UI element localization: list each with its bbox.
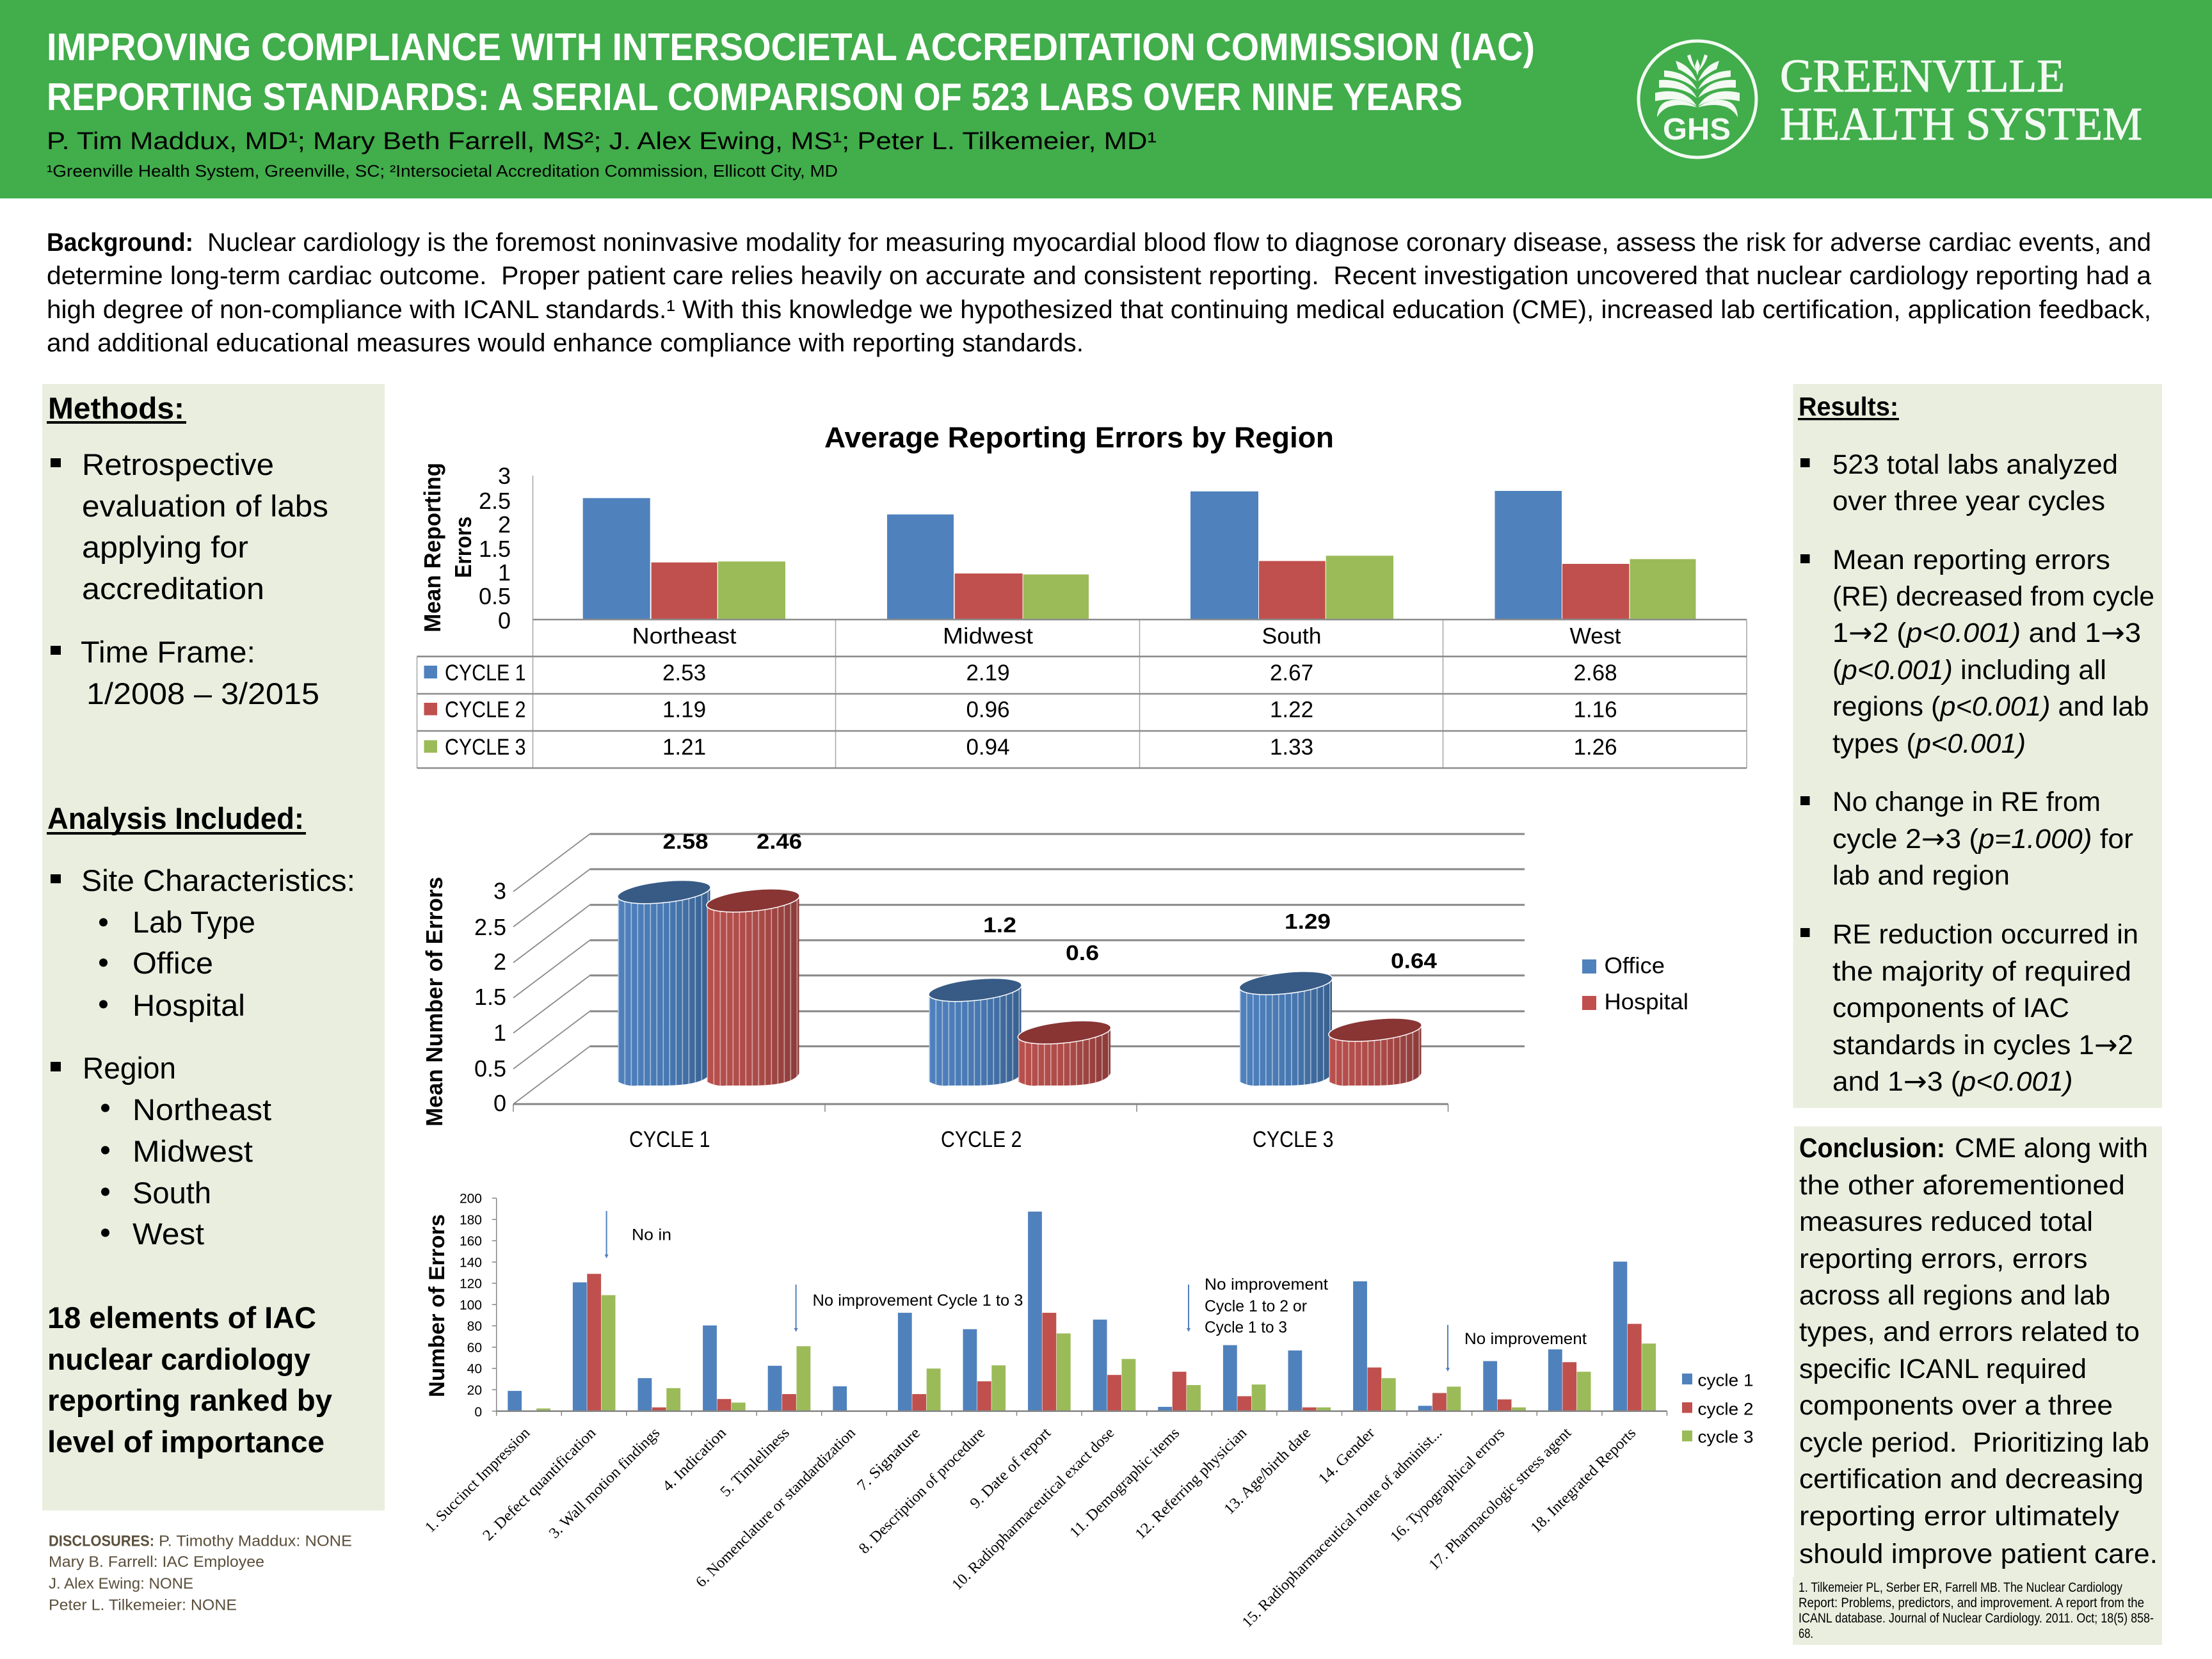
category labels: CYCLE 3	[1253, 1127, 1334, 1152]
result bullet: reduction: RE reduction occurred in	[1832, 919, 2138, 950]
methods list: evaluation of labs	[82, 489, 328, 523]
y axis tick labels: 1	[498, 559, 511, 586]
y axis title: Mean Reporting	[419, 463, 445, 632]
bold note: 18 elements: level of importance	[47, 1425, 325, 1459]
header banner	[0, 0, 2212, 198]
legend	[1682, 1371, 1754, 1447]
data table: 1.19	[662, 698, 706, 722]
disclosures: Mary B. Farrell: IAC Employee	[49, 1553, 264, 1571]
chart: average reporting errors by region	[417, 421, 1747, 768]
x axis labels: 17. Pharmacologic stress agent	[1426, 1425, 1575, 1573]
annotation: no improvement cycle 1 to 2 or 1 to 3	[1187, 1276, 1328, 1336]
result bullet: mean reporting errors: types (p<0.001)	[1832, 728, 2026, 759]
conclusion text: across all regions and lab	[1799, 1280, 2110, 1311]
y axis tick labels	[460, 1192, 482, 1420]
result bullet: no change: No change in RE from	[1832, 787, 2101, 817]
analysis list: West	[132, 1217, 204, 1251]
data table: CYCLE 1	[445, 661, 526, 685]
conclusion text: specific ICANL required	[1799, 1354, 2087, 1384]
category labels	[629, 1127, 1334, 1152]
y axis title: Errors	[450, 517, 476, 578]
conclusion text: measures reduced total	[1799, 1206, 2093, 1237]
disclosures	[49, 1532, 352, 1614]
analysis list: Northeast	[132, 1093, 271, 1126]
analysis list: Region	[83, 1051, 176, 1085]
data labels: 2.58	[663, 830, 708, 853]
conclusion text: reporting errors, errors	[1799, 1244, 2088, 1274]
analysis list: South	[132, 1176, 211, 1210]
bars: cycle 2	[652, 561, 1629, 620]
data table: South	[1262, 623, 1321, 649]
annotation: no improvement cycle 1 to 2 or 1 to 3: Cycle 1 to 3	[1205, 1318, 1287, 1336]
x axis labels: 10. Radiopharmaceutical exact dose	[949, 1425, 1118, 1594]
bars: cycle 3	[536, 1295, 1656, 1411]
result bullet: labs analyzed	[1800, 449, 2118, 517]
y axis tick labels: 100	[460, 1298, 482, 1313]
data table: Midwest	[943, 623, 1033, 649]
data table: 1.21	[662, 735, 706, 760]
data table: 2.67	[1270, 661, 1313, 685]
y axis tick labels: 2.5	[479, 488, 511, 514]
cylinder: cycle 1 office	[616, 877, 712, 1086]
authors: P. Tim Maddux, MD¹; Mary Beth Farrell, MS²; J. Alex Ewing, MS¹; Peter L. Tilkemeier, MD¹	[47, 128, 1157, 155]
y axis tick labels: 2.5	[474, 914, 506, 940]
data table: 1.26	[1573, 735, 1617, 760]
y axis tick labels: 180	[460, 1213, 482, 1228]
conclusion text	[1799, 1133, 2158, 1569]
y axis tick labels: 0	[474, 1405, 482, 1420]
y axis tick labels: 1	[493, 1020, 506, 1046]
background paragraph: and additional educational measures would enhance compliance with reporting standards.	[47, 329, 1084, 357]
y axis tick labels: 0.5	[474, 1055, 506, 1082]
bold note: 18 elements: reporting ranked by	[47, 1383, 332, 1417]
x axis labels: 2. Defect quantification	[480, 1425, 599, 1544]
disclosures: Peter L. Tilkemeier: NONE	[49, 1596, 237, 1614]
y axis tick labels: 200	[460, 1192, 482, 1206]
result bullet: reduction: the majority of required	[1832, 956, 2131, 987]
data labels: 1.29	[1285, 910, 1331, 933]
title: REPORTING STANDARDS: A SERIAL COMPARISON OF 523 LABS OVER NINE YEARS	[47, 76, 1463, 118]
result bullet: no change: lab and region	[1832, 860, 2010, 891]
cylinder: cycle 2 hospital	[1017, 1017, 1112, 1086]
background paragraph: Background:	[47, 228, 193, 257]
y axis title: Mean Number of Errors	[421, 877, 447, 1126]
cylinder: cycle 1 hospital	[705, 885, 801, 1086]
disclosures: DISCLOSURES:	[49, 1532, 154, 1550]
annotation: no improvement cycle 1 to 3	[794, 1285, 1023, 1332]
legend	[1582, 954, 1688, 1014]
logo: Greenville Health System: GREENVILLE	[1780, 50, 2065, 102]
methods list: Time Frame:	[81, 635, 255, 669]
y axis tick labels: 120	[460, 1276, 482, 1292]
conclusion text: components over a three	[1799, 1390, 2113, 1421]
logo: Greenville Health System: HEALTH SYSTEM	[1780, 98, 2142, 150]
result bullet: reduction: components of IAC	[1832, 993, 2069, 1023]
x axis labels: 3. Wall motion findings	[546, 1425, 663, 1542]
disclosures: J. Alex Ewing: NONE	[49, 1575, 193, 1592]
cylinder: cycle 3 hospital	[1327, 1014, 1423, 1086]
x axis labels: 9. Date of report	[967, 1425, 1054, 1512]
title: IMPROVING COMPLIANCE WITH INTERSOCIETAL ACCREDITATION COMMISSION (IAC)	[47, 26, 1535, 68]
bars: cycle 3	[718, 556, 1696, 620]
result bullet: mean reporting errors: 1→2 (p<0.001) and 1→3	[1832, 617, 2141, 649]
analysis list: Lab Type	[132, 905, 255, 939]
data table: CYCLE 2	[445, 698, 526, 722]
result bullet: mean reporting errors: (RE) decreased from cycle	[1832, 581, 2154, 612]
result bullet: mean reporting errors: regions (p<0.001) and lab	[1832, 691, 2149, 722]
y axis tick labels: 40	[467, 1362, 482, 1376]
title	[47, 26, 1535, 118]
analysis list: Office	[132, 946, 213, 980]
legend: cycle 3	[1697, 1427, 1754, 1447]
x axis labels: 12. Referring physician	[1132, 1425, 1250, 1543]
data table: 2.19	[966, 661, 1010, 685]
data table: CYCLE 3	[445, 735, 526, 760]
methods list	[51, 447, 328, 710]
bold note: 18 elements: nuclear cardiology	[47, 1342, 310, 1376]
data labels: 2.46	[757, 830, 802, 853]
annotation: no in: No in	[632, 1226, 671, 1244]
y axis tick labels: 20	[467, 1383, 482, 1398]
reference box	[1793, 1577, 2162, 1645]
y axis tick labels: 1.5	[479, 536, 511, 562]
x axis labels: 5. Timleliness	[717, 1425, 793, 1500]
data labels: 1.2	[983, 913, 1016, 937]
annotation: no improvement cycle 1 to 3: No improvement Cycle 1 to 3	[813, 1292, 1023, 1310]
result bullet: no change: cycle 2→3 (p=1.000) for	[1832, 823, 2133, 855]
data table: 1.22	[1270, 698, 1313, 722]
annotation: no improvement	[1446, 1325, 1587, 1372]
result bullet: no change	[1800, 787, 2133, 891]
panel: methods	[42, 384, 385, 1511]
x axis labels: 16. Typographical errors	[1387, 1425, 1508, 1546]
result bullet: reduction	[1800, 919, 2138, 1098]
result bullet: reduction: standards in cycles 1→2	[1832, 1029, 2133, 1061]
panel: conclusion	[1794, 1126, 2162, 1577]
x axis labels: 1. Succinct Impression	[422, 1425, 533, 1536]
logo: Greenville Health System: GHS	[1663, 113, 1731, 147]
data table: 2.53	[662, 661, 706, 685]
data table: 0.94	[966, 735, 1010, 760]
heading: analysis included: Analysis Included:	[47, 801, 304, 835]
heading: results: Results:	[1799, 392, 1898, 421]
x axis labels: 18. Integrated Reports	[1528, 1425, 1639, 1537]
data labels: 0.6	[1066, 941, 1099, 965]
reference box: ICANL database. Journal of Nuclear Cardiology. 2011. Oct; 18(5) 858-	[1799, 1611, 2154, 1626]
background paragraph: high degree of non-compliance with ICANL standards.¹ With this knowledge we hypothesized that continuing medical education (CME), increased lab certification, application feedback,	[47, 296, 2151, 324]
result bullet: mean reporting errors: Mean reporting errors	[1832, 545, 2110, 575]
bold note: 18 elements: 18 elements of IAC	[47, 1301, 316, 1334]
x axis labels: 4. Indication	[659, 1425, 730, 1495]
heading: methods: Methods:	[48, 391, 184, 425]
data table: Northeast	[632, 623, 737, 649]
conclusion text: Conclusion:	[1799, 1133, 1945, 1164]
reference box: 1. Tilkemeier PL, Serber ER, Farrell MB. The Nuclear Cardiology	[1799, 1580, 2122, 1595]
methods list: 1/2008 – 3/2015	[86, 677, 319, 710]
legend: Hospital	[1604, 990, 1688, 1014]
result bullet: mean reporting errors: (p<0.001) including all	[1832, 655, 2106, 685]
annotation: no improvement: No improvement	[1464, 1330, 1587, 1348]
conclusion text: should improve patient care.	[1799, 1539, 2158, 1569]
y axis tick labels: 3	[493, 878, 506, 904]
x axis labels: 14. Gender	[1315, 1425, 1378, 1487]
y axis tick labels: 80	[467, 1319, 482, 1334]
methods list: applying for	[82, 530, 248, 564]
data table: West	[1569, 623, 1621, 649]
y axis tick labels: 60	[467, 1340, 482, 1355]
x axis labels: 7. Signature	[854, 1425, 924, 1495]
y axis tick labels: 3	[498, 463, 511, 489]
conclusion text: cycle period. Prioritizing lab	[1799, 1427, 2149, 1458]
background paragraph	[47, 228, 2152, 357]
y axis tick labels: 2	[498, 511, 511, 538]
data labels: 0.64	[1391, 949, 1438, 973]
data table	[417, 620, 1747, 768]
y axis tick labels	[479, 463, 511, 634]
conclusion text: reporting error ultimately	[1799, 1501, 2120, 1532]
x axis labels: 6. Nomenclature or standardization	[693, 1425, 859, 1591]
bold note: 18 elements	[47, 1301, 332, 1459]
x axis labels: 11. Demographic items	[1067, 1425, 1183, 1541]
result bullet: reduction: and 1→3 (p<0.001)	[1832, 1066, 2072, 1098]
bars: cycle 1	[583, 491, 1562, 620]
y axis tick labels: 0	[493, 1090, 506, 1116]
methods list: Retrospective	[82, 447, 274, 481]
analysis list: Site Characteristics:	[81, 863, 355, 897]
reference box: Report: Problems, predictors, and improvement. A report from the	[1799, 1596, 2144, 1610]
category labels: CYCLE 2	[941, 1127, 1022, 1152]
annotation: no improvement cycle 1 to 2 or 1 to 3: No improvement	[1205, 1276, 1328, 1294]
bars: cycle 2	[587, 1274, 1642, 1411]
analysis list	[51, 863, 355, 1251]
affiliations: ¹Greenville Health System, Greenville, SC; ²Intersocietal Accreditation Commission, Ellicott City, MD	[47, 161, 838, 180]
conclusion text: CME along with	[1955, 1133, 2148, 1164]
logo: Greenville Health System	[1639, 41, 2142, 157]
cylinder: cycle 2 office	[927, 975, 1023, 1086]
y axis title: Number of Errors	[425, 1214, 449, 1397]
data table: 2.68	[1573, 661, 1617, 685]
y axis title	[419, 463, 476, 632]
background paragraph: determine long-term cardiac outcome. Proper patient care relies heavily on accurate and consistent reporting. Recent investigation uncovered that nuclear cardiology reporting had a	[47, 262, 2152, 290]
y axis tick labels: 0.5	[479, 583, 511, 609]
reference box: 68.	[1799, 1626, 1813, 1641]
analysis list: Hospital	[132, 988, 245, 1022]
y axis tick labels: 2	[493, 949, 506, 975]
data table: 1.16	[1573, 698, 1617, 722]
category labels: CYCLE 1	[629, 1127, 710, 1152]
conclusion text: types, and errors related to	[1799, 1317, 2140, 1347]
x axis labels	[422, 1425, 1639, 1631]
disclosures: P. Timothy Maddux: NONE	[159, 1532, 352, 1550]
data labels	[663, 830, 1438, 973]
result bullet: labs analyzed: over three year cycles	[1832, 486, 2105, 517]
x axis labels: 13. Age/birth date	[1221, 1425, 1314, 1518]
chart: number of errors by element	[422, 1192, 1753, 1631]
annotation: no in	[605, 1211, 671, 1258]
chart title: Average Reporting Errors by Region	[824, 421, 1334, 454]
panel: results	[1793, 384, 2162, 1108]
data table: 0.96	[966, 698, 1010, 722]
result bullet: labs analyzed: 523 total labs analyzed	[1832, 449, 2118, 480]
conclusion text: certification and decreasing	[1799, 1464, 2144, 1495]
result bullet: mean reporting errors	[1800, 545, 2154, 759]
y axis tick labels: 160	[460, 1234, 482, 1249]
analysis list: Midwest	[132, 1134, 253, 1168]
conclusion text: the other aforementioned	[1799, 1170, 2125, 1201]
legend: Office	[1604, 954, 1665, 978]
x axis labels: 15. Radiopharmaceutical route of administ...	[1239, 1425, 1445, 1631]
background paragraph: Nuclear cardiology is the foremost noninvasive modality for measuring myocardial blood flow to diagnose coronary disease, assess the risk for adverse cardiac events, and	[207, 228, 2151, 257]
data table: 1.33	[1270, 735, 1313, 760]
cylinder: cycle 3 office	[1238, 968, 1333, 1086]
y axis tick labels: 1.5	[474, 984, 506, 1010]
methods list: accreditation	[82, 572, 264, 605]
annotation: no improvement cycle 1 to 2 or 1 to 3: Cycle 1 to 2 or	[1205, 1297, 1307, 1315]
bars: cycle 1	[508, 1212, 1627, 1411]
y axis tick labels: 0	[498, 607, 511, 634]
chart: mean number of errors by lab type	[421, 830, 1688, 1152]
y axis tick labels: 140	[460, 1255, 482, 1270]
legend: cycle 2	[1697, 1399, 1754, 1418]
y axis tick labels	[474, 878, 506, 1116]
legend: cycle 1	[1697, 1371, 1754, 1390]
x axis labels: 8. Description of procedure	[856, 1425, 988, 1557]
